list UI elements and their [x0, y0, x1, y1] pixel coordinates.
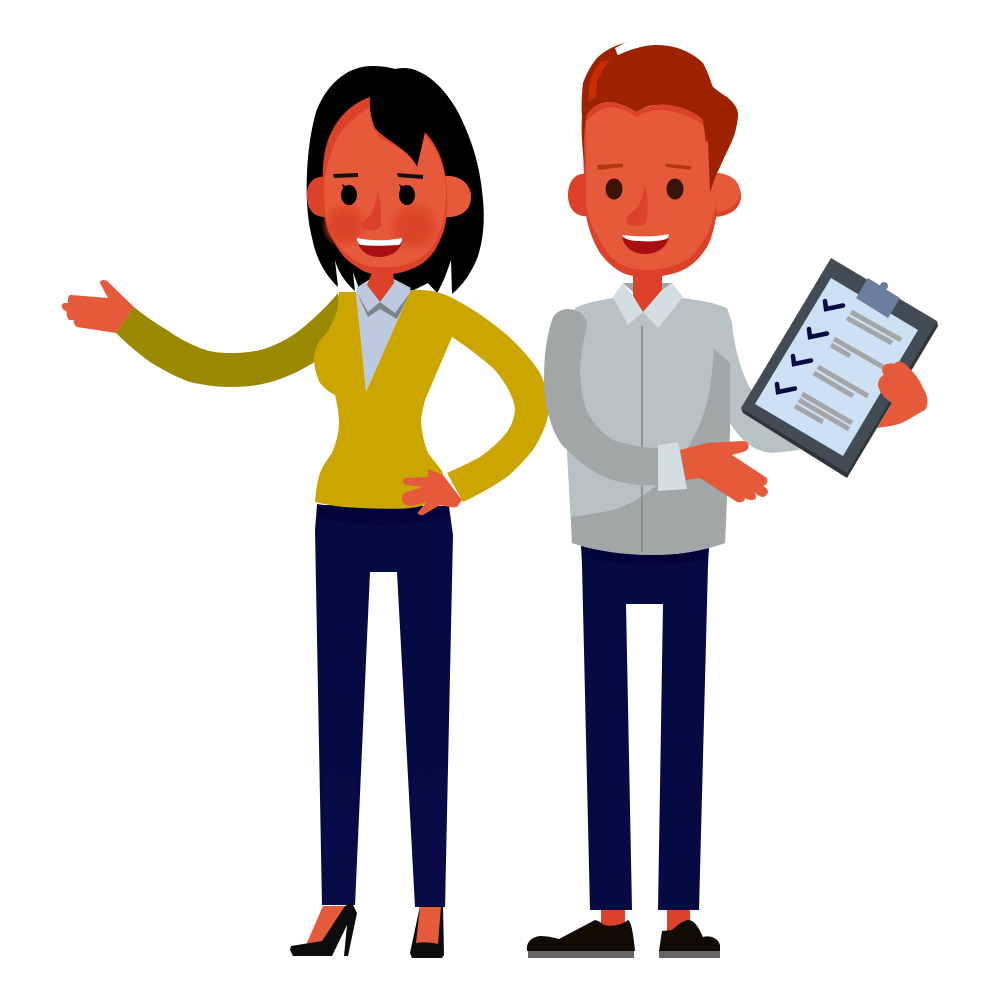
- woman right foot: [416, 907, 441, 944]
- man neck: [633, 268, 662, 312]
- woman cheeks: [321, 201, 369, 249]
- man near arm: [544, 309, 658, 485]
- woman sweater: [314, 290, 549, 510]
- man back arm: [727, 308, 800, 453]
- woman nose: [362, 191, 381, 230]
- woman waist shadow: [317, 504, 450, 525]
- man right ear: [708, 173, 741, 217]
- man right shoe: [659, 920, 720, 951]
- woman pants: [315, 505, 453, 907]
- woman brows: [333, 173, 423, 179]
- man neck front: [633, 268, 662, 312]
- woman hair back: [307, 66, 484, 294]
- woman collar upper: [356, 279, 411, 312]
- man face highlight: [586, 107, 716, 270]
- woman neck: [367, 270, 394, 302]
- man mouth: [622, 238, 669, 254]
- character: woman: [62, 66, 549, 958]
- woman collar shadow: [357, 293, 410, 319]
- woman left shoe: [290, 903, 357, 956]
- man collar: [613, 283, 683, 328]
- man hair highlight: [588, 60, 610, 102]
- man left sole: [528, 951, 634, 958]
- woman face highlight: [324, 107, 446, 267]
- clipboard board: [741, 258, 937, 473]
- man nose: [626, 185, 648, 226]
- clipboard clip: [856, 278, 900, 318]
- man placket: [641, 326, 643, 552]
- clipboard paper: [755, 278, 918, 456]
- man lower shade: [571, 349, 730, 555]
- clipboard: [741, 258, 938, 478]
- man face: [583, 102, 717, 277]
- man body: [567, 298, 732, 555]
- woman hand on hip: [402, 469, 462, 515]
- clipboard check marks: [777, 301, 843, 392]
- clipboard edge: [741, 321, 938, 478]
- man left shoe: [527, 920, 635, 951]
- woman shirt: [356, 290, 411, 392]
- woman raised hand: [62, 280, 134, 333]
- clipboard text lines: [795, 312, 901, 429]
- man right ankle: [667, 910, 690, 932]
- woman pants shading: [322, 770, 447, 907]
- woman right shoe: [410, 906, 444, 958]
- man pants: [581, 545, 709, 910]
- man eyes: [606, 178, 684, 200]
- woman face: [323, 97, 447, 275]
- man collar shadow: [623, 283, 672, 292]
- character: man: [527, 42, 938, 958]
- man right sole: [659, 951, 720, 958]
- man left ankle: [601, 910, 625, 926]
- woman eyes: [341, 184, 415, 205]
- woman left ear: [307, 177, 327, 217]
- man clipboard hand: [877, 362, 927, 428]
- man waist shadow: [581, 546, 709, 565]
- man left ear: [568, 174, 590, 216]
- man cuff: [658, 442, 687, 491]
- woman right ear: [445, 176, 471, 217]
- woman left arm: [116, 293, 342, 387]
- woman left foot: [306, 906, 346, 945]
- woman mouth: [357, 241, 402, 257]
- man near hand: [680, 441, 768, 502]
- man hair: [582, 42, 738, 193]
- man brows: [597, 164, 691, 170]
